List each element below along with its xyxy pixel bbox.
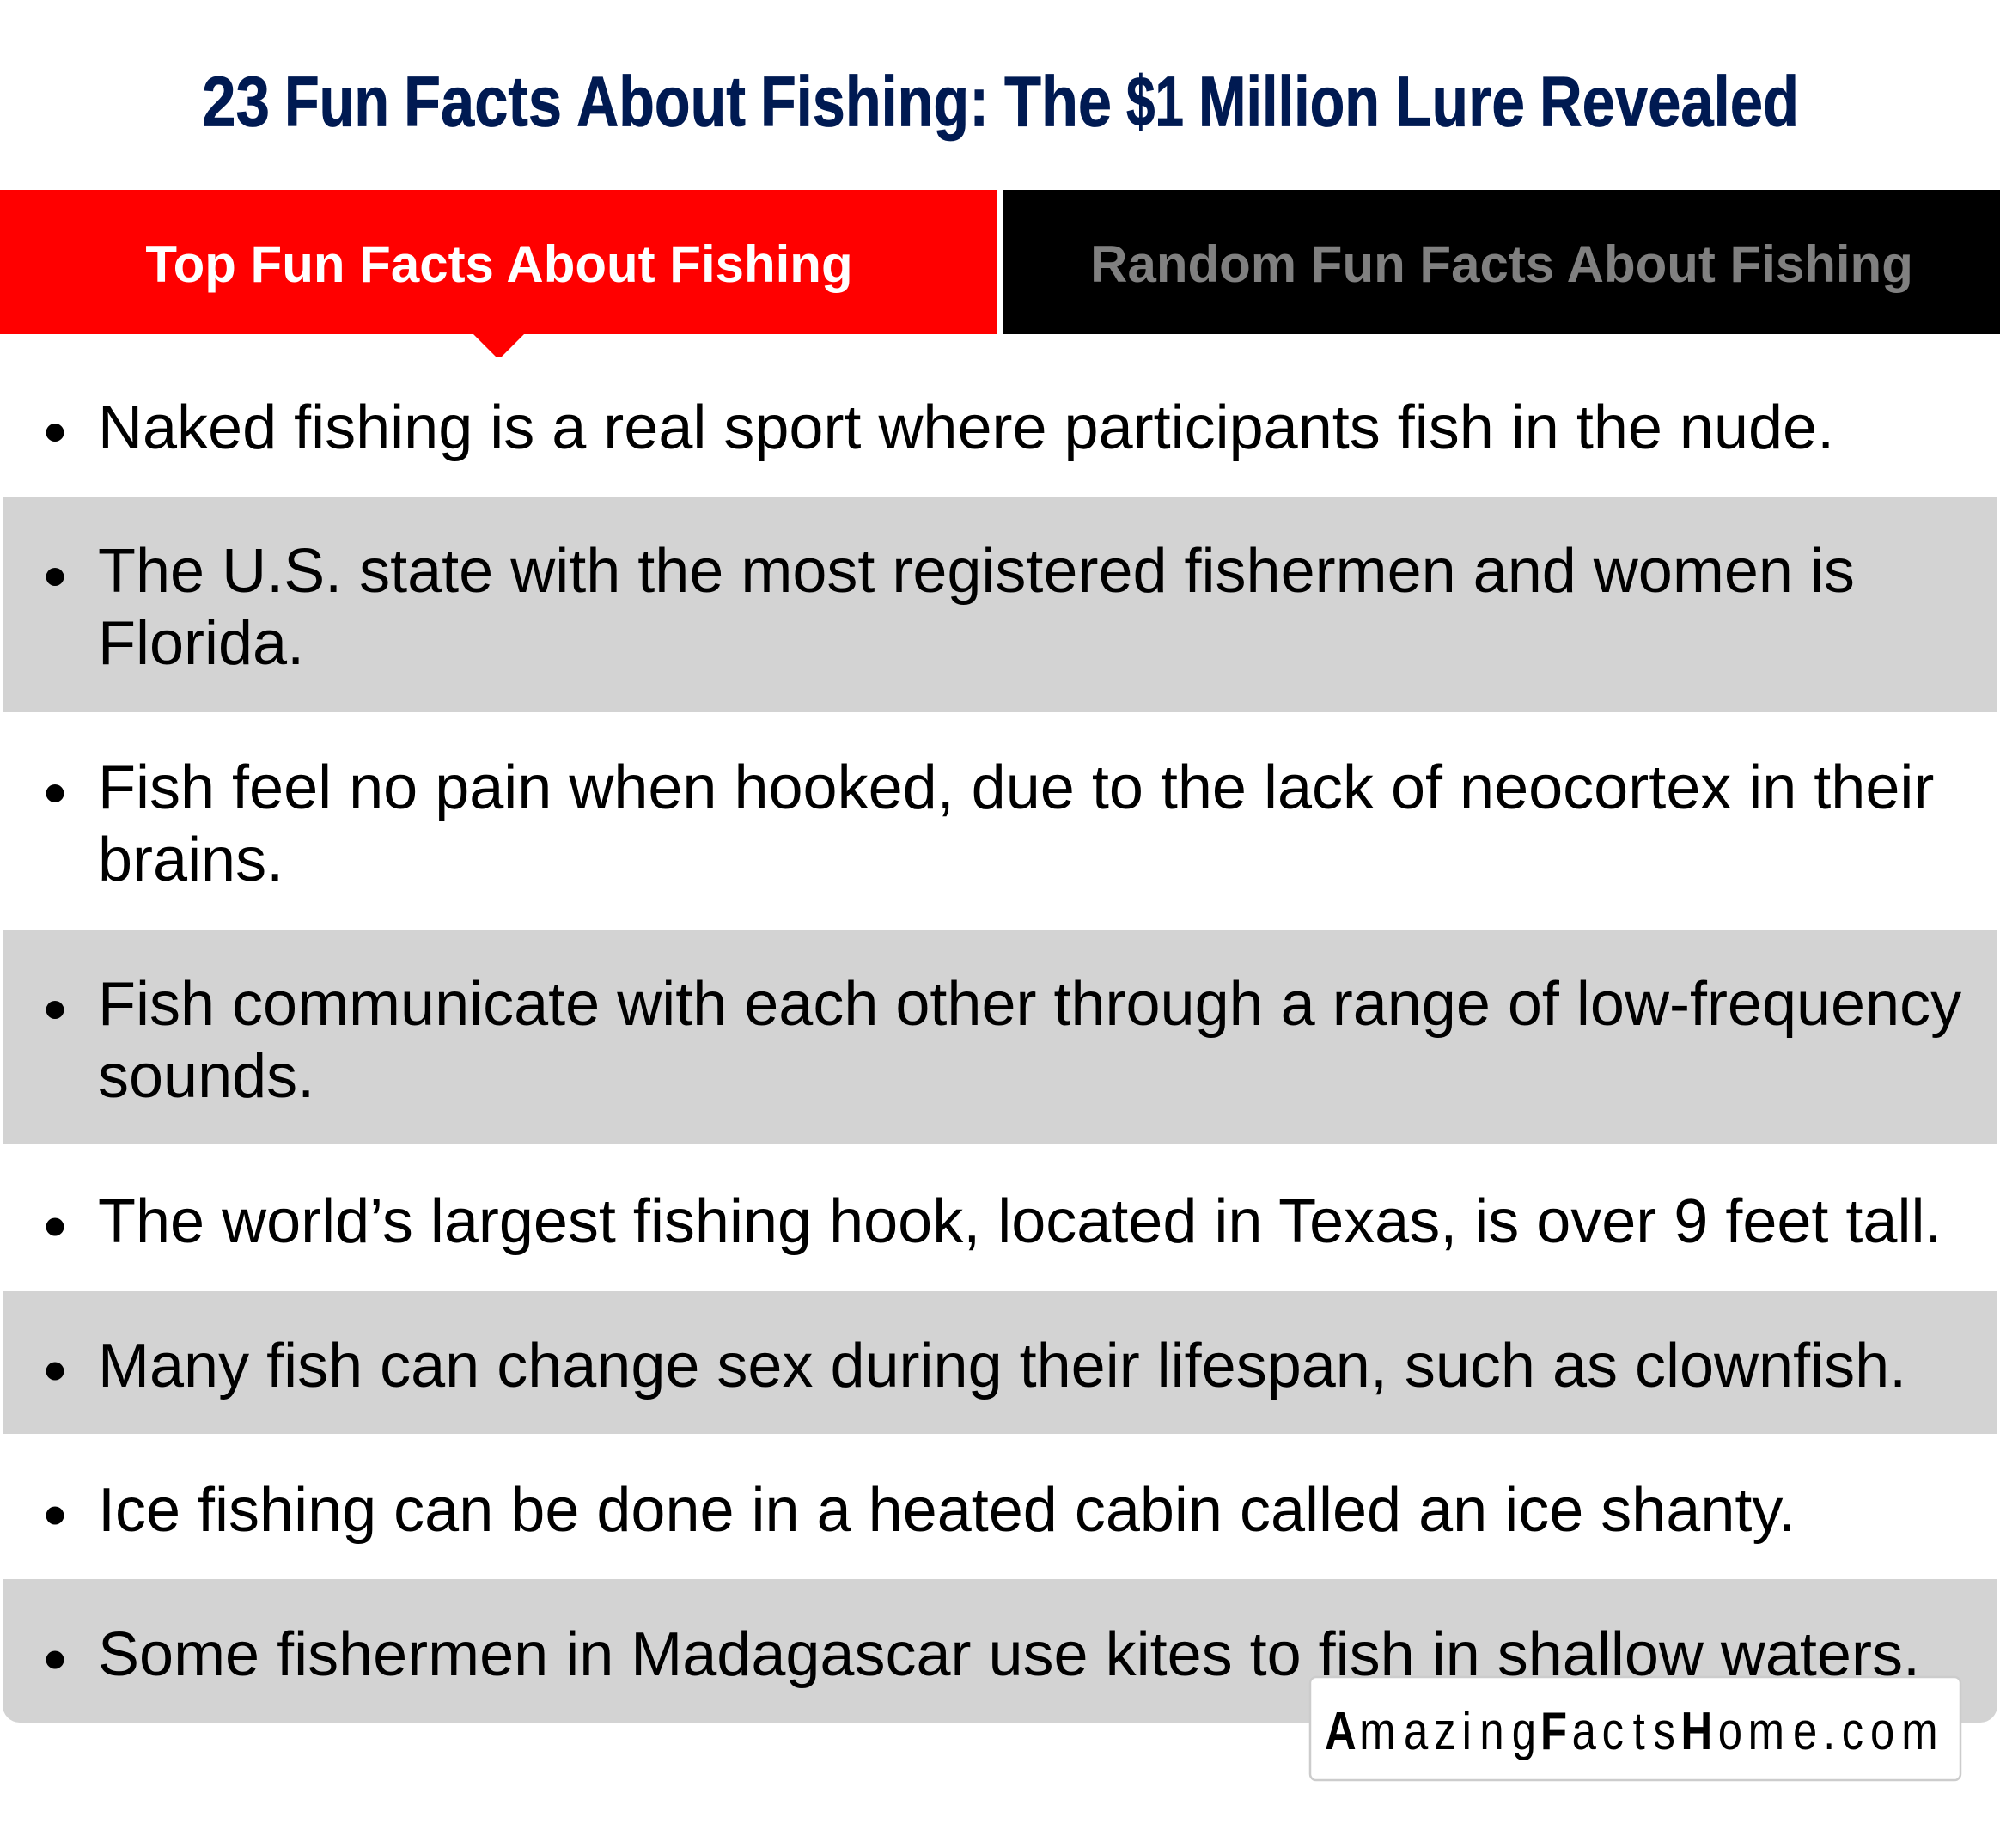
title: Fishing:: [760, 62, 989, 141]
fact 1: Naked fishing is a real sport where participants fish in the nude.: [98, 393, 1834, 462]
fact 3: [46, 753, 1934, 894]
title: Million: [1198, 62, 1380, 141]
title: About: [576, 62, 746, 141]
tab: random fun facts (inactive): [1003, 190, 2000, 334]
title: Facts: [404, 62, 562, 141]
watermark: AmazingFactsHome.com: F: [1540, 1702, 1567, 1761]
title: Fun: [284, 62, 389, 141]
fact 8: [3, 1579, 1997, 1723]
fact 3: brains.: [98, 826, 284, 894]
title: Revealed: [1540, 62, 1799, 141]
watermark: AmazingFactsHome.com: ome.com: [1718, 1702, 1938, 1761]
fact 5: The world’s largest fishing hook, located in Texas, is over 9 feet tall.: [98, 1187, 1942, 1256]
fact 3: Fish feel no pain when hooked, due to the lack of neocortex in their: [98, 753, 1934, 822]
fact 7: Ice fishing can be done in a heated cabin called an ice shanty.: [98, 1476, 1796, 1545]
watermark: AmazingFactsHome.com: A: [1325, 1702, 1357, 1761]
tab: random fun facts (inactive): Random Fun Facts About Fishing: [1090, 235, 1913, 293]
tab: top fun facts (active): [0, 190, 997, 357]
tab: top fun facts (active): Top Fun Facts About Fishing: [145, 235, 853, 293]
watermark: AmazingFactsHome.com: H: [1681, 1702, 1712, 1761]
fact 8: Some fishermen in Madagascar use kites to fish in shallow waters.: [98, 1620, 1920, 1689]
watermark: AmazingFactsHome.com: mazing: [1359, 1702, 1536, 1761]
fact 2: [3, 497, 1997, 712]
title: Lure: [1395, 62, 1525, 141]
fact 6: Many fish can change sex during their lifespan, such as clownfish.: [98, 1332, 1906, 1400]
fact 4: sounds.: [98, 1042, 314, 1111]
fact 4: Fish communicate with each other through a range of low-frequency: [98, 970, 1961, 1039]
watermark: AmazingFactsHome.com: [1310, 1677, 1960, 1780]
title: $1: [1126, 62, 1184, 141]
title: The: [1004, 62, 1112, 141]
fact 2: Florida.: [98, 609, 304, 678]
watermark: AmazingFactsHome.com: acts: [1572, 1702, 1675, 1761]
fact 2: The U.S. state with the most registered fishermen and women is: [98, 537, 1855, 606]
fact 6: [3, 1291, 1997, 1434]
title: 23: [202, 62, 270, 141]
title: [202, 62, 1799, 141]
fact 4: [3, 930, 1997, 1144]
